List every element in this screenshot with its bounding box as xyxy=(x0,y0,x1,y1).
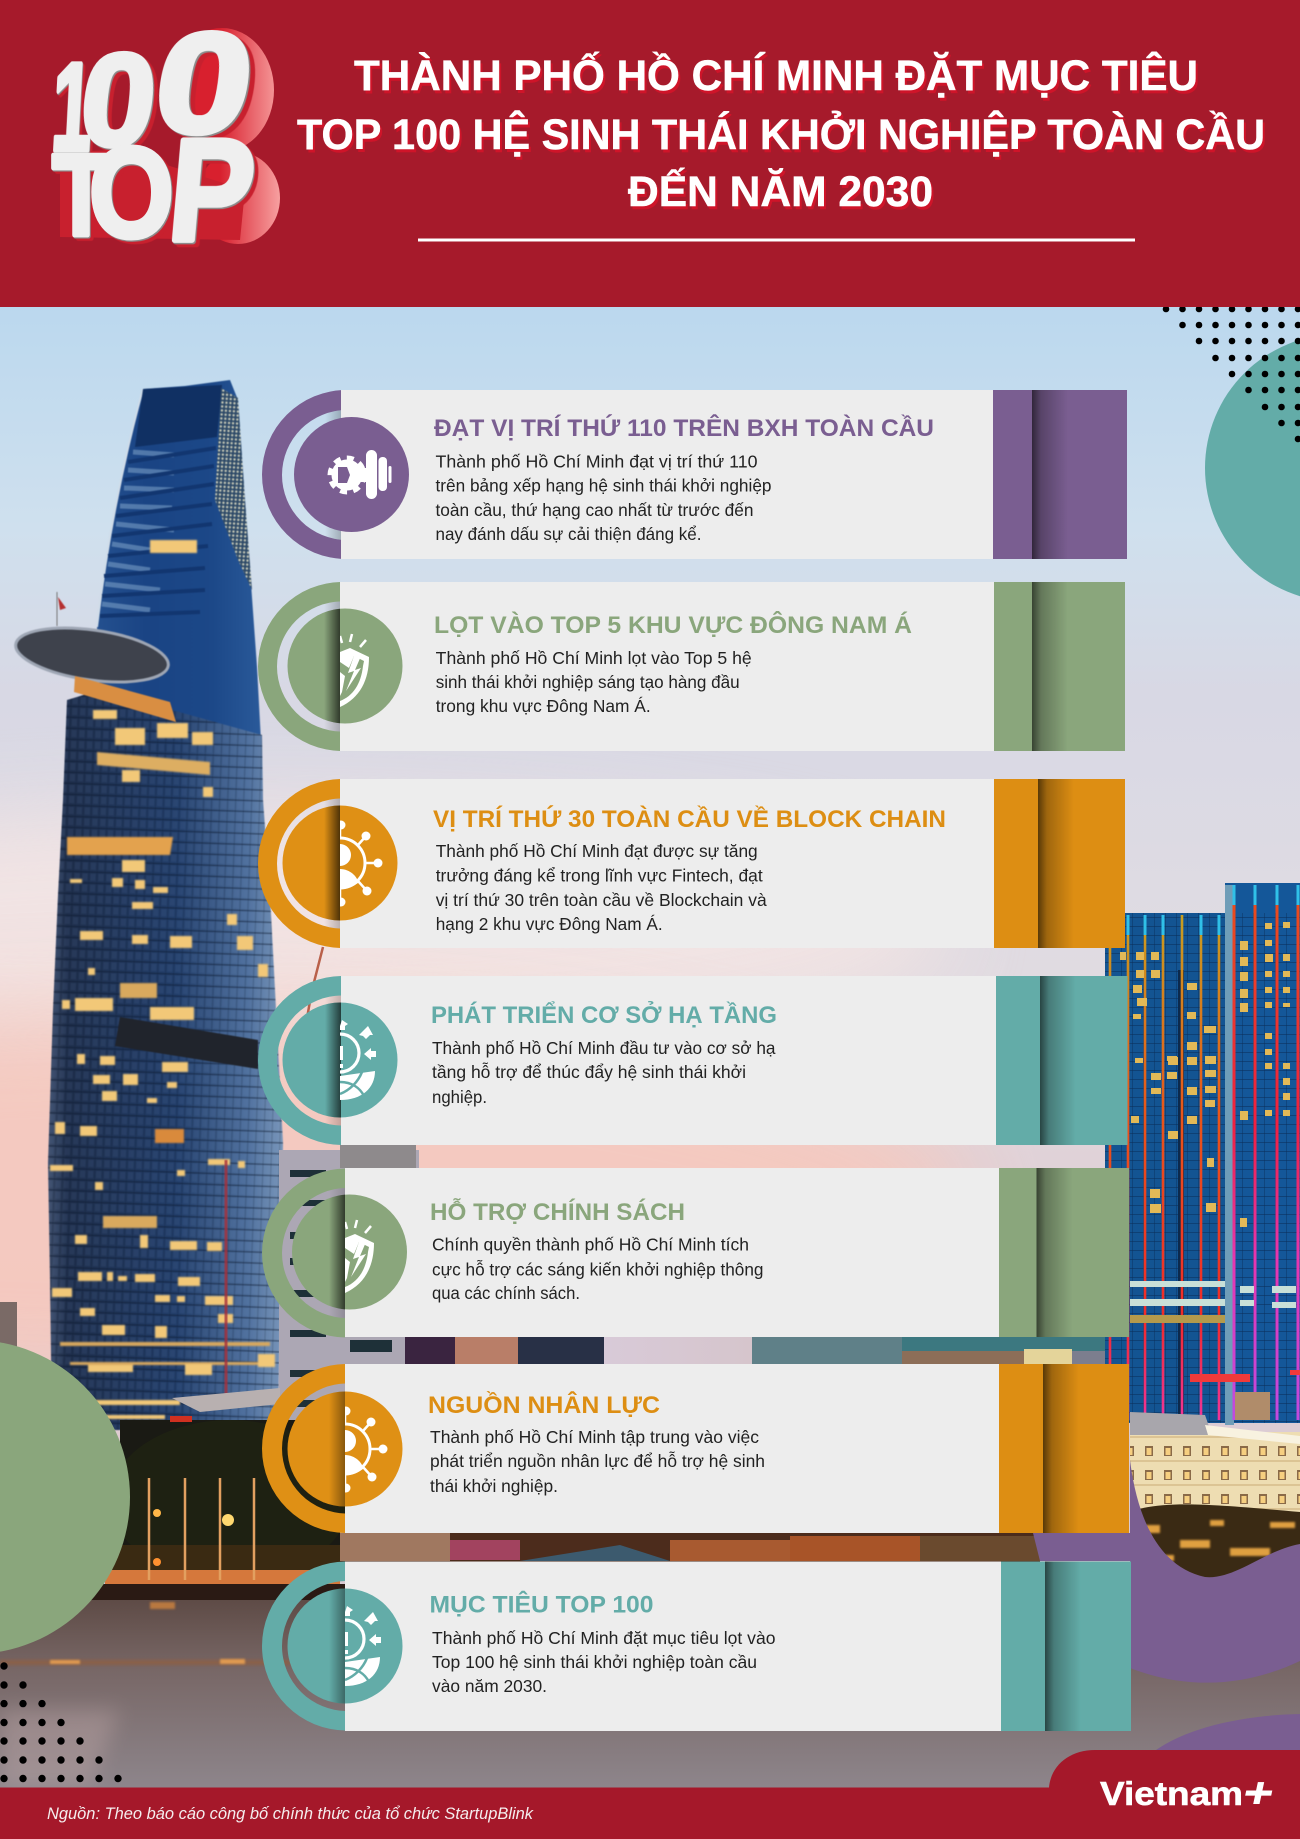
body text: hạng 2 khu vực Đông Nam Á. xyxy=(436,914,663,934)
heading: ĐẠT VỊ TRÍ THỨ 110 TRÊN BXH TOÀN CẦU xyxy=(434,414,934,442)
source note: Nguồn: Theo báo cáo công bố chính thức của tổ chức StartupBlink xyxy=(47,1805,534,1823)
neon stripes left tower xyxy=(1110,915,1219,1420)
title: TOP 100 HỆ SINH THÁI KHỞI NGHIỆP TOÀN CẦU xyxy=(297,110,1265,159)
logo: Vietnam+ xyxy=(1100,1769,1278,1816)
body text: nghiệp. xyxy=(432,1087,487,1107)
ring xyxy=(258,582,340,751)
body text xyxy=(436,648,752,716)
inner circle xyxy=(288,1588,402,1704)
card xyxy=(340,582,994,751)
tower lower section xyxy=(48,690,283,1430)
body text: Thành phố Hồ Chí Minh tập trung vào việc xyxy=(430,1427,759,1447)
body text: thái khởi nghiệp. xyxy=(430,1476,558,1496)
skyline strip between cards xyxy=(604,1337,752,1367)
body text: trưởng đáng kể trong lĩnh vực Fintech, đạt xyxy=(436,866,763,886)
accent tab xyxy=(994,779,1125,948)
card xyxy=(341,976,997,1145)
body text: Top 100 hệ sinh thái khởi nghiệp toàn cầu xyxy=(432,1652,757,1672)
body text: Chính quyền thành phố Hồ Chí Minh tích xyxy=(432,1235,749,1255)
body text: trên bảng xếp hạng hệ sinh thái khởi nghiệp xyxy=(436,476,772,496)
ring shade xyxy=(328,410,341,540)
title underline xyxy=(418,238,1135,242)
body text xyxy=(436,841,767,934)
heading: NGUỒN NHÂN LỰC xyxy=(428,1391,660,1419)
card xyxy=(345,1562,1001,1731)
landmark tower xyxy=(12,380,283,1430)
heading: PHÁT TRIỂN CƠ SỞ HẠ TẦNG xyxy=(431,1000,777,1029)
logo glyphs: 1 xyxy=(49,37,96,177)
ring shade xyxy=(326,602,340,732)
title: ĐẾN NĂM 2030 xyxy=(628,168,933,216)
logo: 100 TOP: T xyxy=(52,131,110,260)
icon: gear and barbell xyxy=(330,450,392,499)
inner circle shade xyxy=(326,608,340,724)
inner circle shade xyxy=(325,806,340,920)
ring xyxy=(262,1168,345,1338)
body text: phát triển nguồn nhân lực để hỗ trợ hệ sinh xyxy=(430,1450,765,1471)
dot pattern top right xyxy=(1163,306,1300,442)
icon: shield xyxy=(345,1220,374,1293)
grey office block xyxy=(279,1150,419,1450)
heading: MỤC TIÊU TOP 100 xyxy=(430,1590,654,1618)
helipad xyxy=(12,620,172,690)
inner circle xyxy=(282,1002,398,1118)
accent tab xyxy=(999,1364,1129,1533)
tab fold xyxy=(1045,1562,1081,1731)
card xyxy=(340,779,994,948)
lit windows xyxy=(50,540,275,1419)
body text: Thành phố Hồ Chí Minh đạt vị trí thứ 110 xyxy=(436,452,758,472)
logo: 100 TOP: 0 xyxy=(74,27,163,173)
icon: network people xyxy=(345,1406,388,1492)
body text: Thành phố Hồ Chí Minh đầu tư vào cơ sở hạ xyxy=(432,1038,776,1058)
ring xyxy=(262,1562,345,1730)
icon: shield xyxy=(340,634,369,707)
neon stripes right tower xyxy=(1234,885,1298,1420)
panel: blockchain rank 30 xyxy=(258,779,1125,948)
panel: human resources xyxy=(262,1364,1129,1533)
accent tab xyxy=(1001,1562,1131,1731)
flag xyxy=(56,592,58,626)
body text xyxy=(436,452,772,544)
body text: tầng hỗ trợ để thúc đẩy hệ sinh thái khởi xyxy=(432,1061,746,1082)
icon: globe with arrows xyxy=(345,1606,381,1686)
inner circle xyxy=(282,806,398,920)
hotel trees xyxy=(1130,1504,1300,1580)
tab fold xyxy=(1043,1364,1079,1533)
accent tab xyxy=(994,582,1125,751)
body text: toàn cầu, thứ hạng cao nhất từ trước đến xyxy=(436,500,754,520)
body text: cực hỗ trợ các sáng kiến khởi nghiệp thông xyxy=(432,1259,764,1280)
river bank buildings xyxy=(280,1430,350,1540)
tab fold xyxy=(1032,390,1068,559)
colonial hotel xyxy=(1130,1417,1300,1540)
decorative purple wave xyxy=(1033,1460,1300,1683)
tab fold xyxy=(1040,976,1076,1145)
logo: 100 TOP xyxy=(49,5,280,271)
body text: Thành phố Hồ Chí Minh đạt được sự tăng xyxy=(436,841,758,861)
body text: Thành phố Hồ Chí Minh đặt mục tiêu lọt vào xyxy=(432,1628,776,1648)
panel: top 5 Southeast Asia xyxy=(258,582,1125,751)
inner circle xyxy=(294,417,409,532)
accent tab xyxy=(996,976,1128,1145)
tower upper section xyxy=(97,380,262,760)
sunset glow xyxy=(0,1010,970,1390)
trees and lights on the river bank xyxy=(90,1388,1040,1600)
panel: policy support xyxy=(262,1168,1129,1338)
inner circle xyxy=(292,1194,407,1310)
tower windows xyxy=(1120,922,1290,1227)
ring shade xyxy=(328,996,341,1126)
body text xyxy=(432,1038,776,1107)
body text xyxy=(432,1235,764,1303)
heading: HỖ TRỢ CHÍNH SÁCH xyxy=(430,1197,685,1226)
card xyxy=(345,1168,999,1337)
accent tab xyxy=(999,1168,1129,1337)
right side towers xyxy=(1105,883,1300,1580)
logo: 100 TOP: O xyxy=(89,122,174,265)
panel: infrastructure xyxy=(258,976,1128,1145)
low rise buildings and crane xyxy=(0,947,1132,1540)
icon: globe with arrows xyxy=(340,1020,376,1100)
heading: LỌT VÀO TOP 5 KHU VỰC ĐÔNG NAM Á xyxy=(434,611,912,639)
body text: sinh thái khởi nghiệp sáng tạo hàng đầu xyxy=(436,672,740,692)
body text: vị trí thứ 30 trên toàn cầu về Blockchain và xyxy=(436,890,767,910)
body text: vào năm 2030. xyxy=(432,1676,547,1696)
body text: Thành phố Hồ Chí Minh lọt vào Top 5 hệ xyxy=(436,648,752,668)
logo: 100 TOP: 0 xyxy=(146,5,262,163)
card xyxy=(345,1364,999,1533)
title xyxy=(297,51,1265,216)
ring xyxy=(258,976,341,1145)
tab fold xyxy=(1032,582,1068,751)
inner circle shade xyxy=(326,1002,341,1118)
decorative teal circle xyxy=(1205,334,1300,602)
body text: nay đánh dấu sự cải thiện đáng kể. xyxy=(436,524,702,544)
logo 3D red extrusion xyxy=(60,28,280,244)
inner circle shade xyxy=(330,1392,345,1506)
icon: network people xyxy=(340,820,382,906)
ring xyxy=(262,390,341,559)
body text: trong khu vực Đông Nam Á. xyxy=(436,696,651,716)
tab fold xyxy=(1038,779,1074,948)
inner circle shade xyxy=(330,1194,345,1310)
pale evening haze xyxy=(0,810,950,1050)
ring xyxy=(258,779,340,948)
footer band xyxy=(0,1750,1300,1839)
decorative purple wave bottom xyxy=(1153,1714,1300,1752)
ring xyxy=(262,1364,345,1533)
body text xyxy=(432,1628,776,1696)
logo: 100 TOP: P xyxy=(163,109,261,271)
inner circle xyxy=(288,608,402,724)
ring shade xyxy=(326,798,340,928)
header band xyxy=(0,0,1300,307)
sky xyxy=(0,307,1300,1607)
accent tab xyxy=(993,390,1127,559)
ring shade xyxy=(334,1188,345,1318)
card xyxy=(341,390,993,559)
river water xyxy=(0,1600,1300,1790)
crane xyxy=(290,947,323,1080)
heading: VỊ TRÍ THỨ 30 TOÀN CẦU VỀ BLOCK CHAIN xyxy=(433,805,946,833)
title: THÀNH PHỐ HỒ CHÍ MINH ĐẶT MỤC TIÊU xyxy=(354,51,1198,100)
inner circle xyxy=(288,1392,402,1506)
panel: top 100 goal xyxy=(262,1562,1131,1731)
dot pattern bottom left xyxy=(0,1662,122,1782)
panel: global rank 110 xyxy=(262,390,1127,559)
inner circle shade xyxy=(331,1588,345,1704)
body text: qua các chính sách. xyxy=(432,1283,580,1303)
dark band xyxy=(115,1017,258,1069)
tab fold xyxy=(1036,1168,1072,1337)
body text xyxy=(430,1427,765,1496)
decorative green circle xyxy=(0,1340,130,1654)
logo: Vietnam+: + xyxy=(1239,1769,1278,1816)
logo: Vietnam+: Vietnam xyxy=(1100,1775,1243,1812)
